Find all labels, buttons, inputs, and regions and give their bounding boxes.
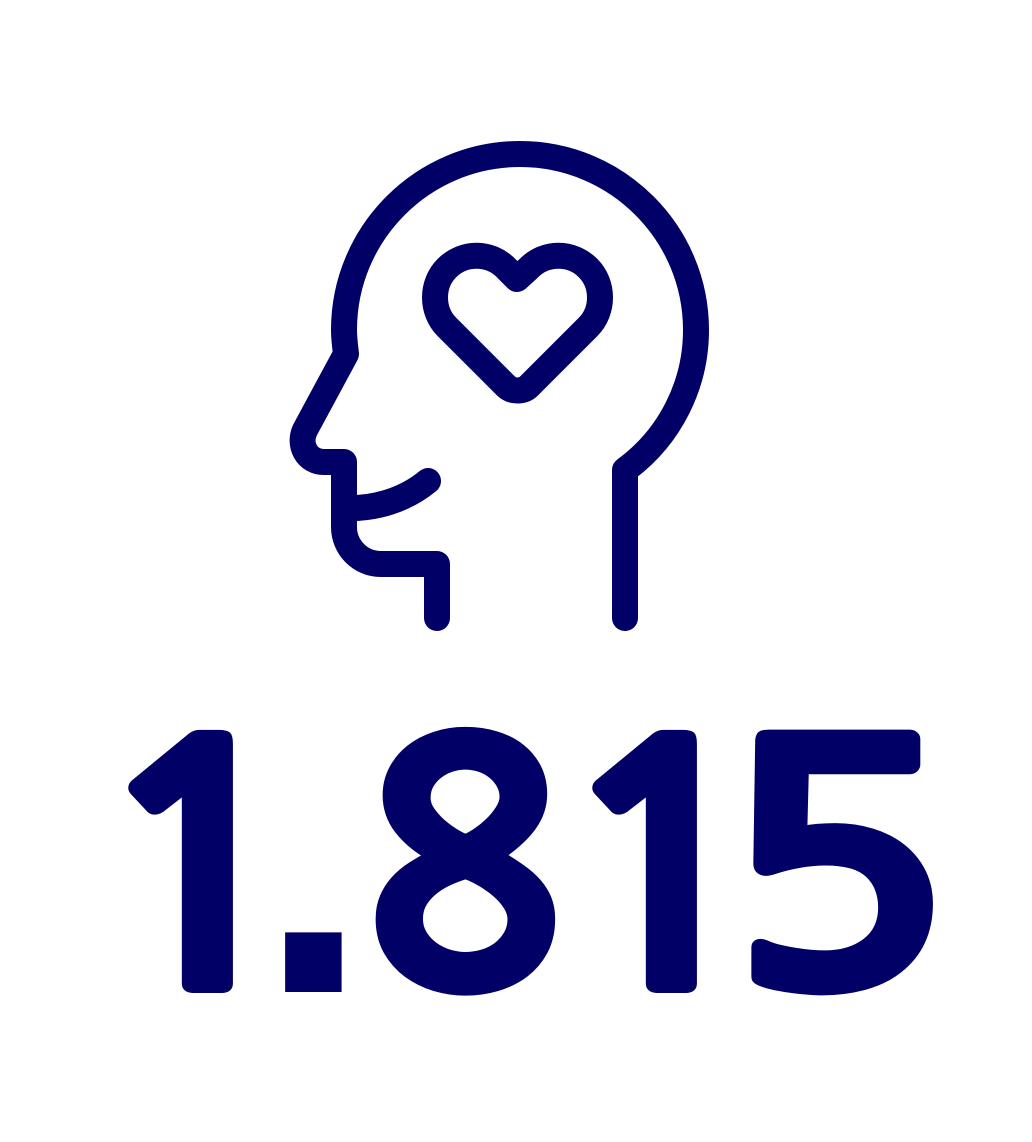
number: 1.815: 1 — [550, 707, 776, 1037]
number: 1.815: 8 — [363, 707, 565, 1037]
icon: head with heart — [303, 154, 696, 618]
number: 1.815: . — [258, 630, 369, 1077]
number: 1.815: 5 — [720, 708, 952, 1037]
number: 1.815: 1 — [86, 707, 312, 1037]
number: 1.815 — [86, 630, 952, 1077]
